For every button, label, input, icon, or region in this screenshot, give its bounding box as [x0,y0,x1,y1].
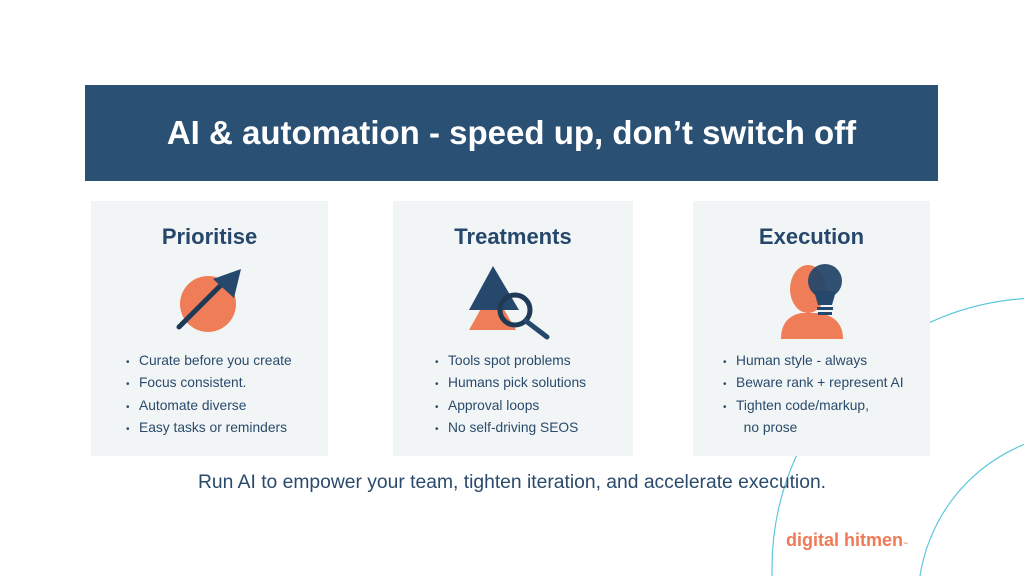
title bar [85,85,938,181]
icon: person with lightbulb [781,264,843,339]
summary text: Run AI to empower your team, tighten iteration, and accelerate execution. [198,472,826,493]
panel: prioritise: Easy tasks or reminders [139,420,287,435]
panel: prioritise: Automate diverse [139,398,246,413]
panel: execution: Human style - always [736,353,867,368]
panel: execution: Execution [759,224,864,249]
panel: treatments: No self-driving SEOS [448,420,578,435]
panel: execution [693,201,930,456]
icon: shapes and magnifier [469,266,550,340]
panel: prioritise [91,201,328,456]
panel: treatments: Approval loops [448,398,539,413]
panel: prioritise: Focus consistent. [139,375,246,390]
icon: target arrow [176,269,241,332]
panel: treatments: Treatments [454,224,572,249]
panel: prioritise: Curate before you create [139,353,292,368]
panel: treatments [393,201,633,456]
panel: execution: Beware rank + represent AI [736,375,904,390]
panel: prioritise: Prioritise [162,224,257,249]
panel: execution: no prose [744,420,797,435]
panel: treatments: Tools spot problems [448,353,571,368]
title bar: AI & automation - speed up, don’t switch off [167,114,856,151]
panel: treatments: Humans pick solutions [448,375,586,390]
panel: execution: Tighten code/markup, [736,398,869,413]
logo: digital hitmen™ [786,530,908,550]
